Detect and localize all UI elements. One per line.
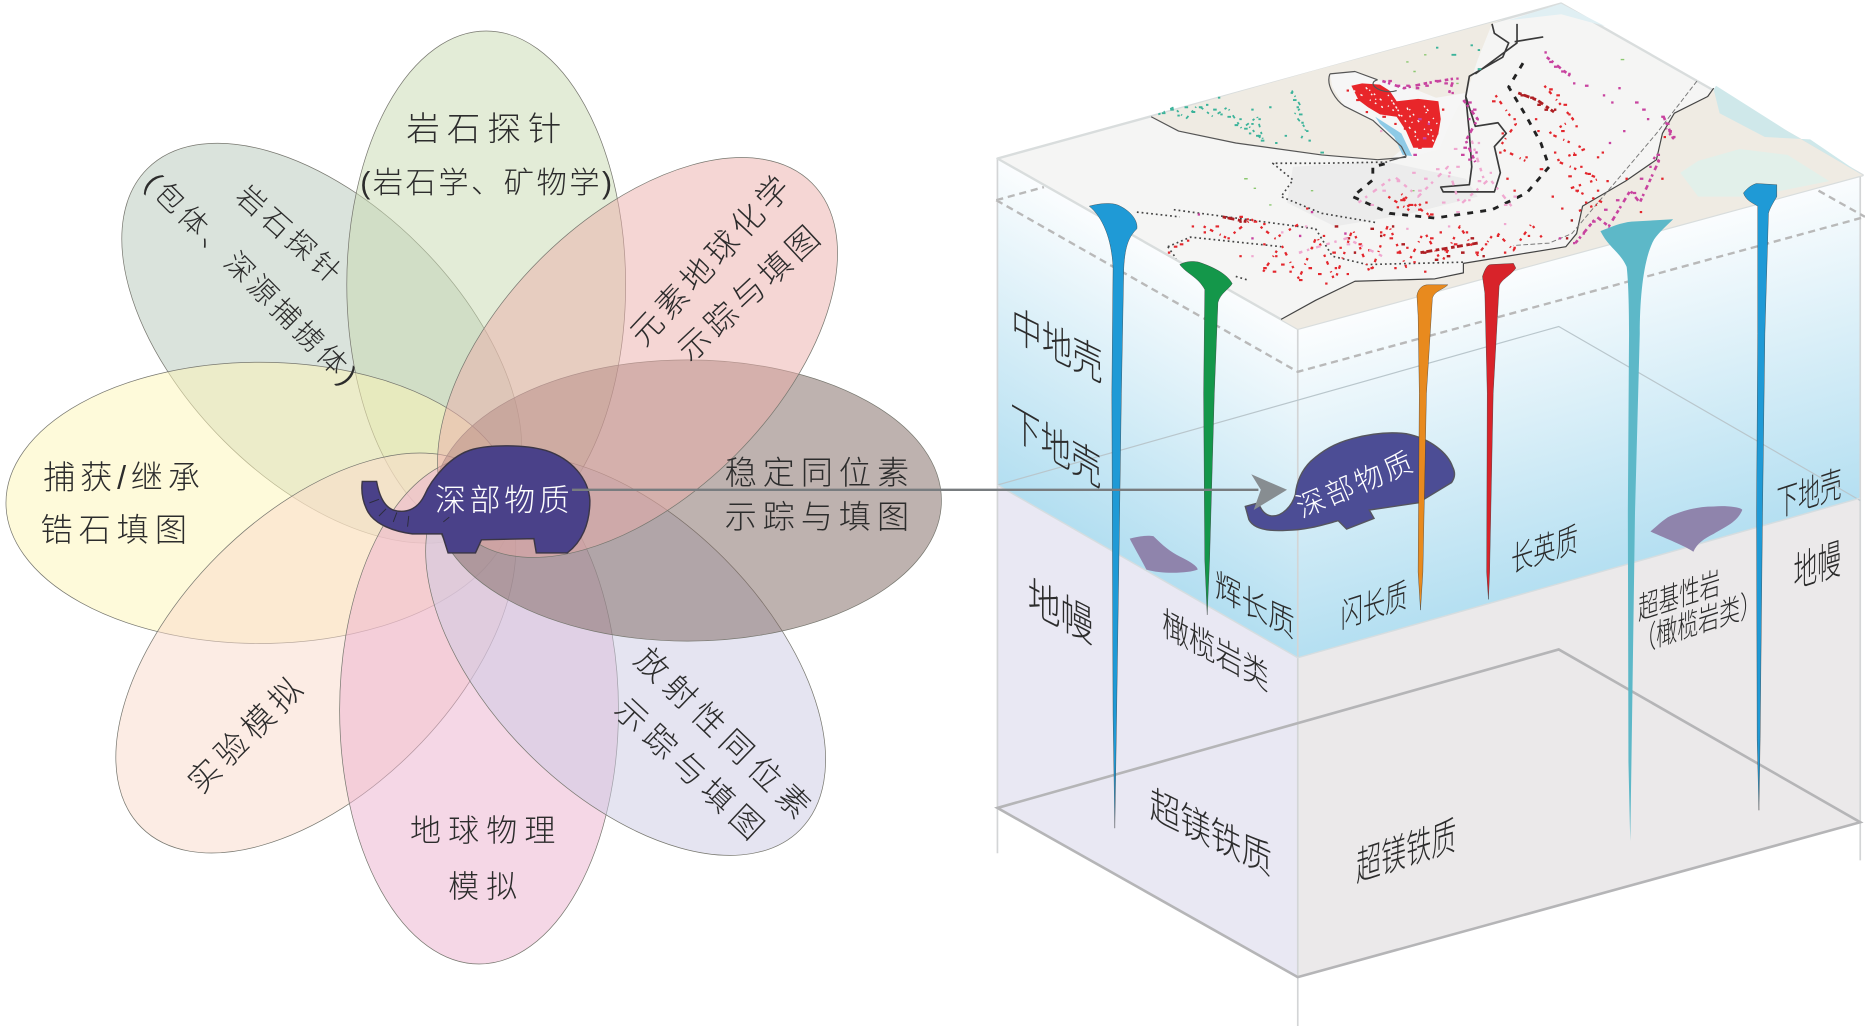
text: middle crust: 中地壳: [1011, 301, 1103, 392]
map dark red band: [1223, 93, 1554, 253]
petal: mantle xenolith probe: [50, 71, 594, 615]
face: right crust: [1298, 176, 1860, 658]
text: stable isotopes: 稳定同位素: [725, 455, 915, 491]
blob: right peridotite body: [1650, 506, 1742, 552]
map pink scatter: [1299, 141, 1513, 256]
map south-east wash: [1680, 149, 1829, 197]
text: gabbro: 辉长质: [1215, 565, 1295, 646]
text: element geochemistry: 元素地球化学: [623, 166, 800, 353]
text: tracing and mapping: 示踪与填图: [671, 216, 830, 368]
plume: green: [1180, 261, 1232, 615]
text: tracing and mapping: 示踪与填图: [725, 499, 915, 535]
map lake: [1375, 117, 1412, 156]
text: mantle right: 地幔: [1794, 536, 1841, 598]
text: tracing and mapping: 示踪与填图: [607, 691, 776, 851]
flower diagram: [6, 31, 941, 964]
bottom plane edges: [997, 649, 1860, 977]
map thick lines: [1441, 24, 1543, 192]
block diagram: [572, 4, 1865, 1026]
block labels: [1010, 301, 1842, 891]
text: peridotite right: （橄榄岩类）: [1635, 585, 1761, 660]
petal: stable isotopes: [434, 360, 941, 641]
dashed layer: [996, 187, 1865, 372]
text: lower crust left: 下地壳: [1010, 398, 1101, 497]
text: simulation: 模拟: [448, 869, 524, 904]
petal labels: [41, 112, 915, 904]
text: petrology mineralogy: (岩石学、矿物学): [360, 166, 615, 200]
map magenta dots: [1198, 52, 1676, 243]
map thick dashes: [1353, 63, 1549, 218]
petal: element geochemistry: [365, 85, 910, 630]
map north boundary: [1151, 117, 1406, 160]
face: left mantle: [997, 485, 1298, 977]
plume: blue right: [1743, 184, 1777, 810]
text: rock probe: 岩石探针: [406, 112, 568, 149]
text: ultramafic left: 超镁铁质: [1150, 781, 1272, 884]
plume: red: [1482, 263, 1516, 599]
face: left crust: [997, 158, 1298, 658]
map base: [997, 4, 1863, 329]
map north beige land: [1151, 19, 1504, 161]
text: captured inherited: 捕获/继承: [43, 460, 205, 496]
map thin fault: [1513, 81, 1697, 245]
text: radiogenic isotopes: 放射性同位素: [628, 641, 822, 831]
text: experimental simulation: 实验模拟: [181, 667, 314, 800]
map red cluster: [1351, 83, 1441, 148]
text: zircon mapping: 锆石填图: [41, 512, 193, 548]
map pink dots: [1251, 131, 1517, 256]
petal: experiments: [44, 381, 588, 925]
map south coast line: [1281, 88, 1714, 319]
arrow shaft: [572, 489, 1258, 491]
icon: elephant right: [1245, 433, 1454, 531]
map magenta scatter: [1382, 57, 1673, 243]
text: lower crust right: 下地壳: [1776, 463, 1842, 525]
icon: elephant left: [362, 446, 590, 553]
text: mantle left: 地幔: [1028, 573, 1093, 653]
text: felsic: 长英质: [1511, 521, 1578, 580]
map basin: [1330, 71, 1466, 157]
plume: blue left: [1089, 203, 1137, 828]
map basin outline: [1329, 71, 1406, 161]
map red dots: [1168, 89, 1666, 284]
label: deep material right: 深部物质: [1292, 446, 1421, 524]
petal: geophysics: [340, 456, 618, 964]
plume: teal: [1600, 219, 1673, 841]
petal: radiogenic isotopes: [353, 383, 898, 928]
map south beige land: [1281, 88, 1863, 329]
map red cluster specks: [1354, 86, 1437, 143]
text: rock probe diagonal: 岩石探针: [229, 180, 350, 293]
map sea: [1714, 86, 1863, 175]
vertical edges: [997, 158, 1860, 1026]
arrow head: [1251, 474, 1287, 510]
petal: captured zircon: [6, 362, 514, 643]
layer line: [997, 327, 1860, 500]
map teal dots: [1162, 45, 1481, 153]
map dotted lines: [1137, 162, 1463, 280]
moho edges: [997, 485, 1860, 658]
face: right mantle: [1298, 498, 1860, 977]
map green dots: [1244, 55, 1624, 205]
text: ultramafic right: 超镁铁质: [1356, 813, 1456, 891]
text: xenoliths diagonal: (包体、深源捕掳体): [138, 167, 365, 394]
arrow: [572, 474, 1287, 510]
plume: orange: [1417, 285, 1448, 610]
map dark red dots: [1227, 95, 1573, 260]
text: ultrabasic rock: 超基性岩: [1638, 565, 1720, 627]
text: diorite: 闪长质: [1341, 577, 1407, 636]
map red scatter: [1204, 86, 1603, 281]
petal: rock probe: [347, 31, 626, 539]
map teal scatter: [1158, 91, 1306, 141]
map east sea: [1509, 4, 1605, 26]
text: peridotite left: 橄榄岩类: [1162, 603, 1269, 698]
map plane: [997, 4, 1863, 329]
text: geophysics: 地球物理: [410, 813, 562, 848]
map relief: [1287, 161, 1478, 226]
label: deep material left: 深部物质: [435, 483, 573, 518]
blob: left peridotite body: [1130, 536, 1198, 573]
